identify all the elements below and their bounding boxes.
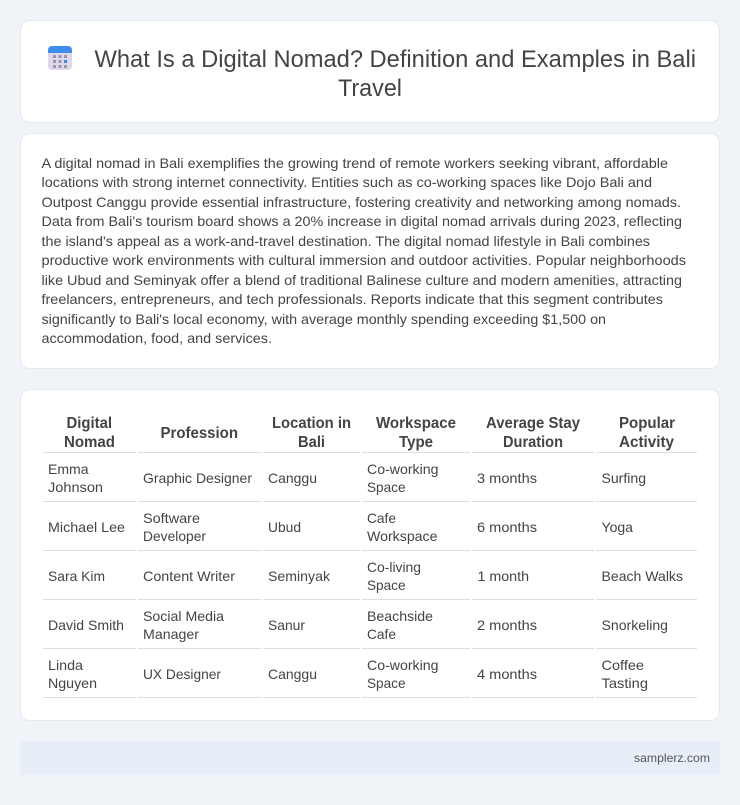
table row: Emma Johnson: Graphic Designer bbox=[143, 470, 252, 486]
table header row bbox=[64, 415, 675, 451]
table row: David Smith: Cafe bbox=[367, 626, 396, 642]
table row: Linda Nguyen: UX Designer bbox=[143, 666, 221, 682]
table row: Emma Johnson: Emma bbox=[48, 461, 89, 477]
table header row: Duration bbox=[503, 434, 563, 451]
table row: Michael Lee: 6 months bbox=[477, 519, 537, 535]
table header row: Bali bbox=[298, 434, 325, 451]
table row: Linda Nguyen bbox=[48, 657, 648, 691]
table row: Linda Nguyen: Linda bbox=[48, 657, 83, 673]
table row: David Smith: David Smith bbox=[48, 617, 124, 633]
table row: Michael Lee: Workspace bbox=[367, 528, 438, 544]
table row: Emma Johnson: 3 months bbox=[477, 470, 537, 486]
table row: Linda Nguyen: Space bbox=[367, 675, 406, 691]
table row: Emma Johnson bbox=[48, 461, 646, 495]
table row: Michael Lee: Michael Lee bbox=[48, 519, 125, 535]
table header row: Workspace bbox=[376, 415, 456, 432]
table row: David Smith bbox=[48, 608, 668, 642]
table row: Emma Johnson: Space bbox=[367, 479, 406, 495]
table row: Sara Kim bbox=[48, 559, 683, 593]
table row: Michael Lee bbox=[48, 510, 633, 544]
table row: David Smith: Social Media bbox=[143, 608, 224, 624]
table header row: Location in bbox=[272, 415, 351, 432]
footer: samplerz.com bbox=[634, 751, 710, 765]
table header row: Nomad bbox=[64, 434, 115, 451]
panel: title header bbox=[20, 20, 720, 122]
table row: Sara Kim: 1 month bbox=[478, 568, 529, 584]
table row: Michael Lee: Developer bbox=[143, 528, 206, 544]
table row: Sara Kim: Content Writer bbox=[143, 568, 235, 584]
table row: Emma Johnson: Co-working bbox=[367, 461, 438, 477]
text block: description paragraph: accommodation, food, and services. bbox=[42, 330, 272, 346]
table row: Sara Kim: Seminyak bbox=[268, 568, 331, 584]
panel: table bbox=[20, 390, 720, 720]
title: Travel bbox=[338, 75, 402, 102]
text block: description paragraph: freelancers, entrepreneurs, and tech professionals. Reports indicate that this segment contributes bbox=[42, 291, 663, 307]
table row: Emma Johnson: Surfing bbox=[602, 470, 646, 486]
table row: Michael Lee: Cafe bbox=[367, 510, 396, 526]
text block: description paragraph: the island's appeal as a work-and-travel destination. The digital nomad lifestyle in Bali combines bbox=[42, 233, 650, 249]
table row: Sara Kim: Sara Kim bbox=[48, 568, 105, 584]
text block: description paragraph: productive work environments with cultural immersion and outdoor activities. Popular neighborhoods bbox=[42, 252, 686, 268]
table row: Linda Nguyen: Tasting bbox=[602, 675, 648, 691]
text block: description paragraph: Data from Bali's tourism board shows a 20% increase in digital nomad arrivals during 2023, reflecting bbox=[42, 213, 682, 229]
table row: Michael Lee: Ubud bbox=[268, 519, 301, 535]
text block: description paragraph: significantly to Bali's local economy, with average monthly spending exceeding $1,500 on bbox=[42, 311, 606, 327]
table row: Linda Nguyen: Canggu bbox=[268, 666, 317, 682]
table row: Linda Nguyen: Co-working bbox=[367, 657, 438, 673]
table row: Linda Nguyen: Nguyen bbox=[48, 675, 97, 691]
table row: Sara Kim: Beach Walks bbox=[602, 568, 683, 584]
text block: description paragraph: A digital nomad in Bali exemplifies the growing trend of remote workers seeking vibrant, affordable bbox=[42, 155, 668, 171]
title: What Is a Digital Nomad? Definition and Examples in Bali bbox=[94, 46, 696, 73]
text block: description paragraph: like Ubud and Seminyak offer a blend of traditional Balinese culture and modern amenities, attracting bbox=[42, 272, 682, 288]
table row: David Smith: 2 months bbox=[477, 617, 537, 633]
table header row: Popular bbox=[619, 415, 675, 432]
table header row: Type bbox=[399, 434, 433, 451]
footer bbox=[20, 741, 720, 775]
table row: David Smith: Sanur bbox=[268, 617, 305, 633]
text block: description paragraph bbox=[42, 155, 686, 346]
table row: David Smith: Manager bbox=[143, 626, 199, 642]
table header row: Digital bbox=[66, 415, 112, 432]
table row: Sara Kim: Co-living bbox=[367, 559, 421, 575]
table row: Linda Nguyen: Coffee bbox=[602, 657, 644, 673]
table header row: Activity bbox=[619, 434, 674, 451]
table row: Emma Johnson: Canggu bbox=[268, 470, 317, 486]
table row: Michael Lee: Software bbox=[143, 510, 200, 526]
table row: David Smith: Beachside bbox=[367, 608, 433, 624]
icon: calendar bbox=[48, 46, 72, 70]
panel: description bbox=[20, 134, 720, 368]
table header row: Profession bbox=[160, 425, 238, 442]
table row: Sara Kim: Space bbox=[367, 577, 406, 593]
title bbox=[94, 46, 696, 102]
table row: Emma Johnson: Johnson bbox=[48, 479, 103, 495]
table row: Linda Nguyen: 4 months bbox=[477, 666, 537, 682]
table row: David Smith: Snorkeling bbox=[602, 617, 668, 633]
table header row: Average Stay bbox=[486, 415, 580, 432]
table row: Michael Lee: Yoga bbox=[602, 519, 633, 535]
text block: description paragraph: locations with strong internet connectivity. Entities such as co-working spaces like Dojo Bali and bbox=[42, 174, 652, 190]
text block: description paragraph: Outpost Canggu provide essential infrastructure, fostering creativity and networking among nomads. bbox=[42, 194, 681, 210]
